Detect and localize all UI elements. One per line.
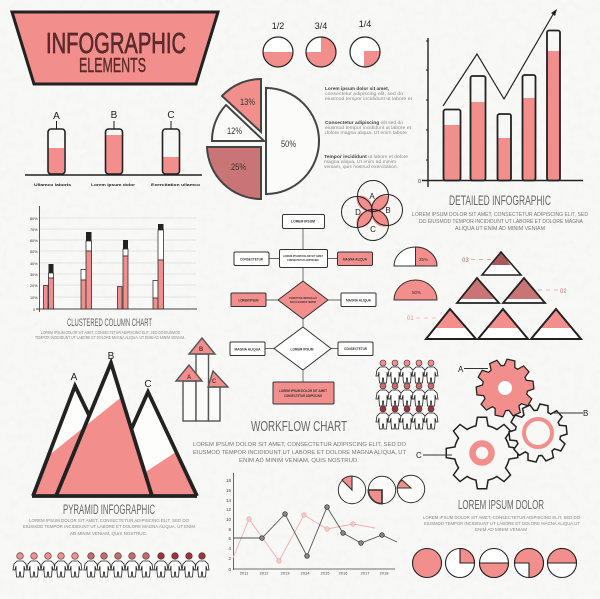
house arrows: B	[199, 347, 204, 353]
lorem ipsum dolor caption: LOREM IPSUM DOLOR	[458, 497, 544, 512]
pyramid infographic caption: LOREM IPSUM DOLOR SIT AMET, CONSECTETUR ADIPISCING ELIT, SED DO	[29, 518, 189, 523]
clustered column caption: TEMPOR INCIDIDUNT UT LABORE ET DOLORE MAGNA ALIQUA. UT ENIM AD MINIM VENIAM.	[35, 335, 185, 340]
pie notes: Consectetur adipiscing elit sed do	[325, 120, 403, 125]
workflow flowchart: CONSECTETUR ADIPISCING	[287, 258, 320, 262]
people row	[13, 553, 209, 577]
workflow flowchart: CONSECTETUR	[240, 256, 263, 262]
pyramid infographic caption: AD MINIM VENIAM, QUIS NOSTRUD.	[70, 531, 147, 536]
line chart: 10	[226, 517, 231, 522]
detailed infographic caption	[412, 192, 588, 232]
line chart: 14	[226, 498, 231, 503]
triangle pyramid: 02	[560, 289, 567, 295]
workflow flowchart: MAGNA ALIQUA	[234, 346, 261, 352]
lorem ipsum dolor caption: LOREM IPSUM DOLOR SIT AMET, CONSECTETUR ADIPISCING ELIT, SED DO	[423, 515, 580, 520]
pie notes: magna aliqua. Ut enim ad minim	[324, 159, 396, 164]
pie notes	[324, 86, 413, 169]
mountain pyramid chart: A	[71, 372, 78, 383]
workflow flowchart: MAGNA ALIQUA	[343, 256, 367, 262]
fraction circles: 3/4	[315, 21, 327, 31]
line chart: 2015	[321, 570, 330, 576]
clustered column chart: 20%	[30, 284, 38, 288]
gears: C	[416, 451, 422, 460]
detailed infographic caption: ALIQUA UT ENIM AD MINIM VENIAM	[455, 226, 545, 232]
workflow flowchart: LOREM IPSUM DOLOR SIT AMET	[279, 389, 327, 393]
title banner: INFOGRAPHIC	[46, 28, 186, 60]
workflow flowchart: CONSECTETUR	[344, 346, 367, 351]
people grid	[376, 360, 438, 429]
clustered column chart: 10%	[30, 296, 38, 300]
workflow flowchart: LOREM IPSUM	[291, 218, 316, 224]
workflow chart caption: ENIM AD MINIM VENIAM, QUIS NOSTRUD.	[239, 458, 359, 464]
pie notes: eiusmod tempor incididunt ut labore et	[325, 96, 413, 101]
pyramid infographic caption: EIUSMOD TEMPOR INCIDIDUNT UT LABORE ET DOLORE MAGNA ALIQUA. UT ENIM	[23, 524, 195, 529]
fraction circles	[263, 19, 380, 67]
workflow flowchart: CONSECTETUR ADIPISCING ELIT	[289, 296, 317, 300]
pyramid infographic caption: PYRAMID INFOGRAPHIC	[63, 502, 155, 517]
venn diagram: D	[355, 208, 361, 217]
semicircle gauges: 25%	[419, 257, 428, 262]
pie notes: Lorem ipsum dolor sit amet,	[325, 86, 389, 91]
pie notes: consectetur adipiscing elit, sed do	[325, 91, 403, 96]
test tube bar chart: Ullamco laboris	[34, 182, 72, 187]
lorem ipsum dolor caption: EIUSMOD TEMPOR INCIDIDUNT UT LABORE ET DOLORE MAGNA ALIQUA.UT	[424, 521, 580, 526]
mountain pyramid chart: B	[108, 351, 115, 362]
line chart: 0	[228, 567, 231, 572]
fraction circles: 1/2	[272, 21, 284, 31]
bottom fraction circles	[412, 548, 576, 578]
exploded pie chart: 12%	[227, 126, 242, 136]
detailed infographic caption: DO EIUSMOD TEMPOR INCIDIDUNT UT LABORE ET DOLORE MAGNA	[419, 219, 583, 225]
triangle pyramid: 01	[407, 316, 414, 322]
house arrows	[176, 338, 228, 421]
clustered column chart: 70%	[30, 228, 38, 232]
workflow chart caption: WORKFLOW CHART	[251, 418, 347, 435]
line chart: 2016	[339, 570, 348, 576]
workflow chart caption: EIUSMOD TEMPOR INCIDIDUNT UT LABORE ET DOLORE MAGNA ALIQUA, UT	[193, 450, 407, 456]
lorem ipsum dolor caption: ENIM AD MINIM VENIAM	[475, 527, 527, 532]
gears	[416, 355, 588, 488]
house arrows: C	[212, 379, 217, 385]
clustered column chart: 30%	[30, 273, 38, 277]
title banner	[12, 12, 218, 84]
workflow chart caption	[193, 418, 407, 464]
workflow flowchart	[230, 214, 376, 404]
detailed infographic caption: LOREM IPSUM DOLOR SIT AMET, CONSECTETUR ADIPISCING ELIT, SED	[412, 212, 588, 218]
exploded pie chart: 25%	[231, 162, 246, 172]
semicircle gauges	[394, 247, 437, 300]
triangle pyramid: 03	[462, 258, 469, 264]
detailed bar chart: 0	[418, 179, 421, 185]
clustered column chart: 40%	[30, 262, 38, 266]
triangle pyramid	[407, 252, 581, 339]
test tube bar chart: A	[53, 111, 60, 122]
workflow flowchart: LOREM IPSUM	[290, 346, 314, 352]
workflow chart caption: LOREM IPSUM DOLOR SIT AMET, CONSECTETUR ADIPISCING ELIT, SED DO	[193, 442, 407, 448]
line chart: 2012	[260, 570, 269, 576]
line chart: 8	[228, 527, 231, 532]
clustered column caption	[35, 317, 185, 340]
pyramid infographic caption	[23, 502, 195, 536]
venn diagram: B	[385, 206, 391, 215]
workflow flowchart: SED DO EIUSMOD TEMPOR	[290, 300, 317, 304]
line chart	[226, 473, 397, 576]
venn diagram	[342, 180, 402, 240]
line chart: 2017	[361, 570, 370, 576]
title banner: ELEMENTS	[79, 55, 146, 77]
test tube bar chart: C	[167, 110, 175, 121]
exploded pie chart	[207, 79, 319, 199]
line chart: 2011	[240, 570, 249, 576]
workflow flowchart: LOREM IPSUM	[238, 298, 259, 302]
clustered column chart: 0	[33, 308, 35, 312]
gears: B	[583, 409, 588, 418]
clustered column chart	[30, 206, 197, 312]
line chart: 4	[228, 546, 231, 551]
exploded pie chart: 50%	[281, 139, 296, 149]
detailed bar chart	[418, 9, 583, 187]
line chart: 2013	[281, 570, 290, 576]
exploded pie chart: 13%	[240, 97, 255, 107]
line chart: 2014	[301, 570, 310, 576]
clustered column caption: LOREM IPSUM DOLOR SIT AMET, CONSECTETUR ADIPISCING ELIT, SED DO EIUSMOD	[41, 330, 180, 335]
line chart: 2018	[380, 570, 389, 576]
test tube bar chart: B	[111, 110, 118, 121]
line chart: 6	[228, 536, 231, 541]
fraction circles: 1/4	[359, 19, 371, 29]
house arrows: A	[187, 375, 192, 381]
venn diagram: C	[370, 225, 376, 234]
clustered column caption: CLUSTERED COLUMN CHART	[67, 317, 152, 329]
gears: A	[458, 365, 464, 374]
line chart: 2	[228, 556, 231, 561]
pie notes: eiusmod tempor incididunt ut labore et	[325, 125, 412, 130]
test tube bar chart	[25, 110, 202, 187]
pie notes: dolore magna aliqua. Ut enim labore	[325, 130, 407, 135]
venn diagram: A	[369, 192, 375, 201]
semicircle gauges: 50%	[412, 290, 421, 295]
lorem ipsum dolor caption	[423, 497, 580, 532]
test tube bar chart: Exercitation ullamco	[151, 182, 201, 187]
small pie charts	[338, 475, 425, 504]
line chart: 16	[226, 488, 231, 493]
pie notes: Tempor incididunt ut labore et dolore	[324, 154, 408, 159]
clustered column chart: 50%	[30, 250, 38, 254]
mountain pyramid chart: C	[144, 379, 152, 390]
clustered column chart: 80%	[30, 217, 38, 221]
clustered column chart: 60%	[30, 239, 38, 243]
line chart: 18	[226, 478, 231, 483]
workflow flowchart: MAGNA ALIQUA	[346, 298, 371, 302]
pie notes: veniam, quis nostrud exercitation.	[324, 164, 398, 169]
line chart: 12	[226, 507, 231, 512]
workflow flowchart: LOREM IPSUM DOLOR SIT AMET	[283, 254, 323, 258]
test tube bar chart: Lorem ipsum dolor	[91, 182, 136, 187]
workflow flowchart: CONSECTETUR ADIPISCING	[284, 394, 322, 398]
mountain pyramid chart	[32, 351, 197, 496]
